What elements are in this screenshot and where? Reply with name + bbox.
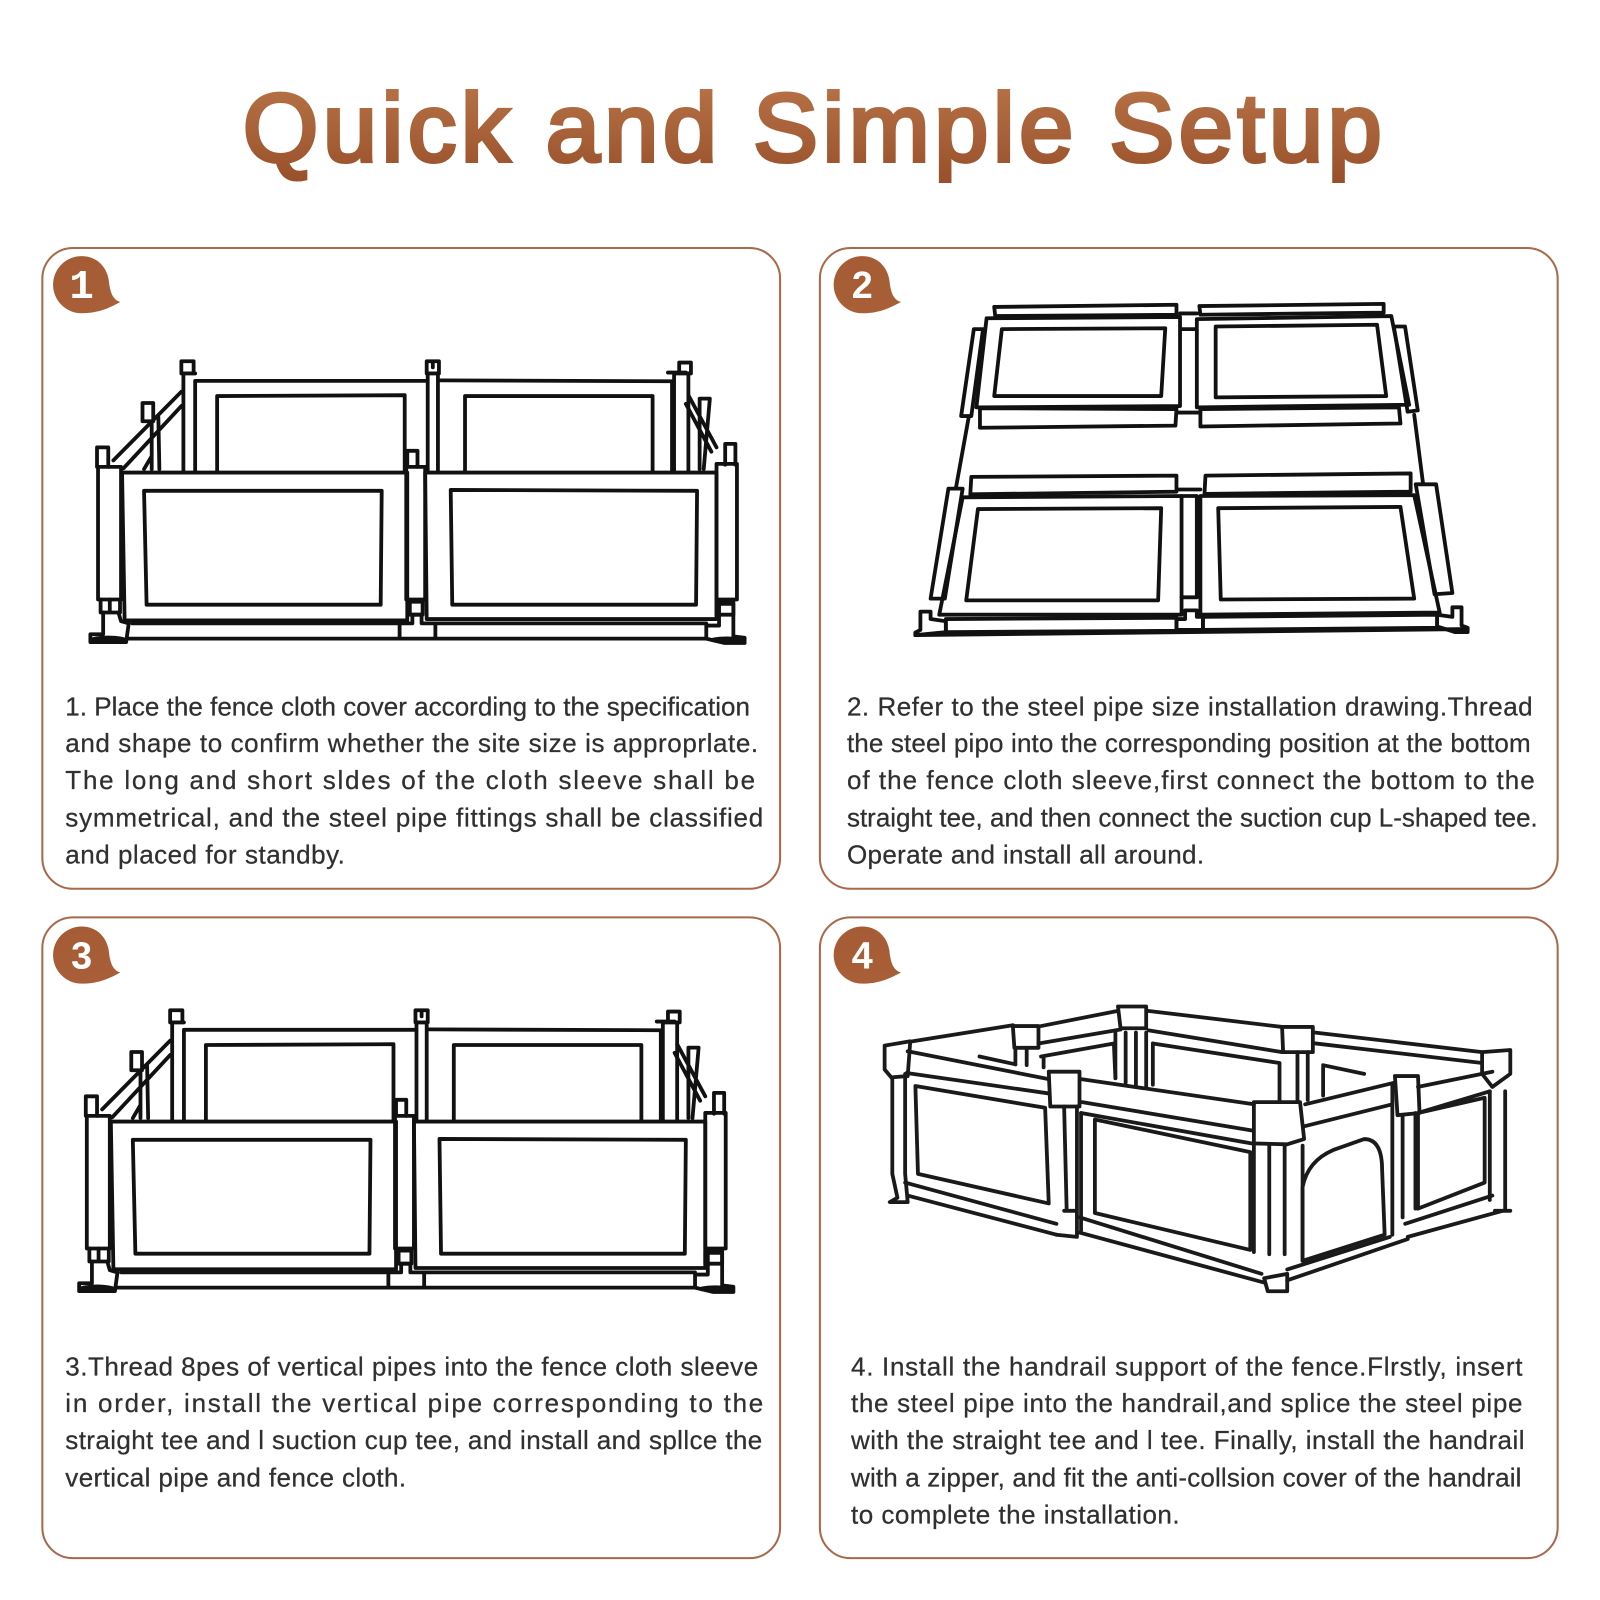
illustration: laid out fence with two front and two back panels (90, 361, 745, 643)
illustration: base pipes threaded through fence cloth sleeves (915, 304, 1468, 635)
step 2 text: 2. Refer to the steel pipe size installation drawing.Thread (847, 691, 1533, 721)
step 2 number badge: 2 (852, 264, 873, 306)
step 1 text: and shape to confirm whether the site size is approprlate. (65, 728, 758, 758)
step 4 number badge: 4 (852, 934, 873, 976)
step 2 text: straight tee, and then connect the suction cup L-shaped tee. (847, 803, 1538, 833)
step 2 text (847, 691, 1538, 869)
step 3 text: in order, install the vertical pipe corresponding to the (65, 1388, 763, 1418)
step 4 text: the steel pipe into the handrail,and splice the steel pipe (851, 1388, 1522, 1418)
panel: step 1 (42, 248, 780, 889)
panel: step 4 (820, 917, 1558, 1558)
step 4 text: 4. Install the handrail support of the fence.Flrstly, insert (851, 1352, 1523, 1382)
panel: step 3 (42, 917, 780, 1558)
step 2 text: Operate and install all around. (847, 839, 1204, 869)
step 2 number badge (834, 256, 901, 313)
title: Quick and Simple Setup (243, 73, 1382, 182)
step 1 text: The long and short sldes of the cloth sleeve shall be (65, 765, 755, 795)
step 4 text (850, 1352, 1524, 1529)
step 4 text: with a zipper, and fit the anti-collsion cover of the handrail (850, 1463, 1521, 1493)
illustration: completed fence with handrails in perspective (885, 1006, 1510, 1291)
step 4 text: to complete the installation. (851, 1499, 1180, 1529)
step 3 text: vertical pipe and fence cloth. (65, 1463, 406, 1493)
step 3 text: straight tee and l suction cup tee, and install and spllce the (65, 1425, 762, 1455)
step 2 text: the steel pipo into the corresponding position at the bottom (847, 728, 1531, 758)
step 1 number badge: 1 (69, 265, 94, 311)
step 3 text (65, 1352, 763, 1493)
step 1 text: and placed for standby. (65, 839, 345, 869)
panel: step 2 (820, 248, 1558, 889)
step 1 text: 1. Place the fence cloth cover according to the specification (65, 691, 750, 721)
step 1 number badge (53, 256, 120, 313)
step 4 number badge (834, 927, 901, 984)
step 3 text: 3.Thread 8pes of vertical pipes into the fence cloth sleeve (65, 1352, 758, 1382)
step 3 number badge (53, 927, 120, 984)
step 4 text: with the straight tee and l tee. Finally, install the handrail (850, 1425, 1524, 1455)
step 1 text (65, 691, 763, 869)
step 1 text: symmetrical, and the steel pipe fittings shall be classified (65, 803, 763, 833)
step 2 text: of the fence cloth sleeve,first connect the bottom to the (847, 765, 1535, 795)
illustration: vertical pipes inserted into the fence (79, 1010, 733, 1292)
step 3 number badge: 3 (71, 934, 92, 976)
